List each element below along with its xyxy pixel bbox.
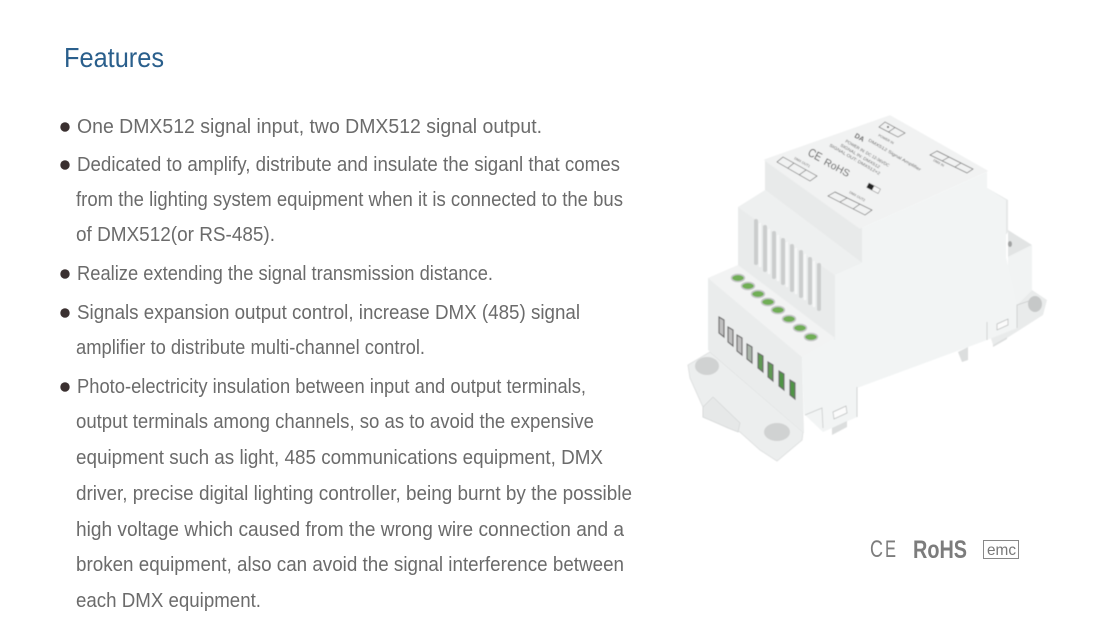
feature 5: photo-electricity insulation: high voltage which caused from the wrong wire connection and a: [76, 519, 625, 541]
top face printed labels: SIGNAL IN: DMX512: [840, 143, 882, 170]
upper block top face: [765, 116, 987, 228]
middle step top: [738, 190, 862, 275]
feature 4: expansion output: amplifier to distribute multi-channel control.: [76, 337, 425, 359]
top face printed labels: POWER IN: DC 12-36VDC: [844, 139, 890, 168]
product illustration: DIN-rail signal amplifier: [688, 116, 1047, 461]
top face printed labels: DA: [853, 133, 865, 144]
terminal print: right: DMX IN: [933, 158, 945, 168]
EMC mark: emc: [987, 542, 1016, 559]
DIP switch print: [867, 183, 880, 194]
feature 2: amplify and distribute: [60, 154, 623, 246]
green screw holes: [732, 274, 818, 341]
feature 5: photo-electricity insulation: output terminals among channels, so as to avoid the expensive: [76, 411, 594, 433]
feature 5: photo-electricity insulation: equipment such as light, 485 communications equipment, DMX: [76, 447, 603, 469]
CE mark: E: [885, 536, 896, 563]
feature 5: photo-electricity insulation: [60, 376, 632, 612]
left foot: [688, 352, 803, 461]
top face printed labels: SIGNAL OUT: DMX512×2: [828, 143, 882, 176]
terminal print: top: POWER IN: [878, 133, 895, 145]
terminal print: right: [930, 151, 973, 173]
feature 5: photo-electricity insulation: broken equipment, also can avoid the signal interference between: [76, 554, 624, 576]
feature 5: photo-electricity insulation: Photo-electricity insulation between input and output terminals,: [77, 376, 586, 398]
upper block front face: [765, 160, 862, 263]
top face printed labels: DMX512 Signal Amplifier: [868, 138, 923, 172]
middle step front face: [738, 207, 835, 340]
feature 5: photo-electricity insulation: driver, precise digital lighting controller, being burnt by the possible: [76, 483, 632, 505]
CE RoHS print: CE: [806, 145, 825, 164]
feature 3: transmission distance: Realize extending the signal transmission distance.: [77, 263, 493, 285]
terminal print: top: [878, 122, 905, 145]
terminal openings: [719, 317, 795, 399]
CE mark: C: [870, 536, 883, 563]
feature 2: amplify and distribute: from the lighting system equipment when it is connected to the bus: [76, 189, 623, 211]
certification marks: [870, 536, 1018, 564]
feature 2: amplify and distribute: Dedicated to amplify, distribute and insulate the siganl that comes: [77, 154, 620, 176]
CE RoHS print: RoHS: [822, 157, 852, 180]
RoHS mark: RoHS: [913, 536, 967, 564]
housing seam lines: [805, 301, 1029, 428]
terminal print: left: DMX OUT1: [794, 156, 811, 168]
clip latches: [833, 319, 1008, 419]
feature list: [60, 116, 632, 612]
upper rear step: [987, 172, 1008, 260]
terminal print: left: [777, 156, 817, 181]
title: Features: [64, 42, 164, 73]
feature 4: expansion output: [60, 302, 580, 359]
top face printed labels: [828, 133, 923, 176]
CE RoHS print: [806, 145, 852, 180]
feature 4: expansion output: Signals expansion output control, increase DMX (485) signal: [77, 302, 580, 324]
feature 5: photo-electricity insulation: each DMX equipment.: [76, 590, 261, 612]
terminal block front: [708, 278, 804, 433]
terminal print: bottom: [828, 190, 872, 215]
big side face: [802, 172, 1017, 432]
rail notches: [832, 337, 1007, 435]
DIN clip: [703, 397, 740, 432]
rear block: [1008, 230, 1032, 305]
feature 1: signal input and output: One DMX512 signal input, two DMX512 signal output.: [77, 116, 542, 138]
right foot: [987, 290, 1047, 345]
CE mark: [870, 536, 896, 563]
ventilation slots: [756, 221, 819, 309]
foot mounting holes: [695, 357, 790, 441]
feature 2: amplify and distribute: of DMX512(or RS-485).: [76, 224, 275, 246]
terminal block top: [708, 265, 835, 357]
terminal print: bottom: DMX OUT2: [849, 190, 866, 202]
